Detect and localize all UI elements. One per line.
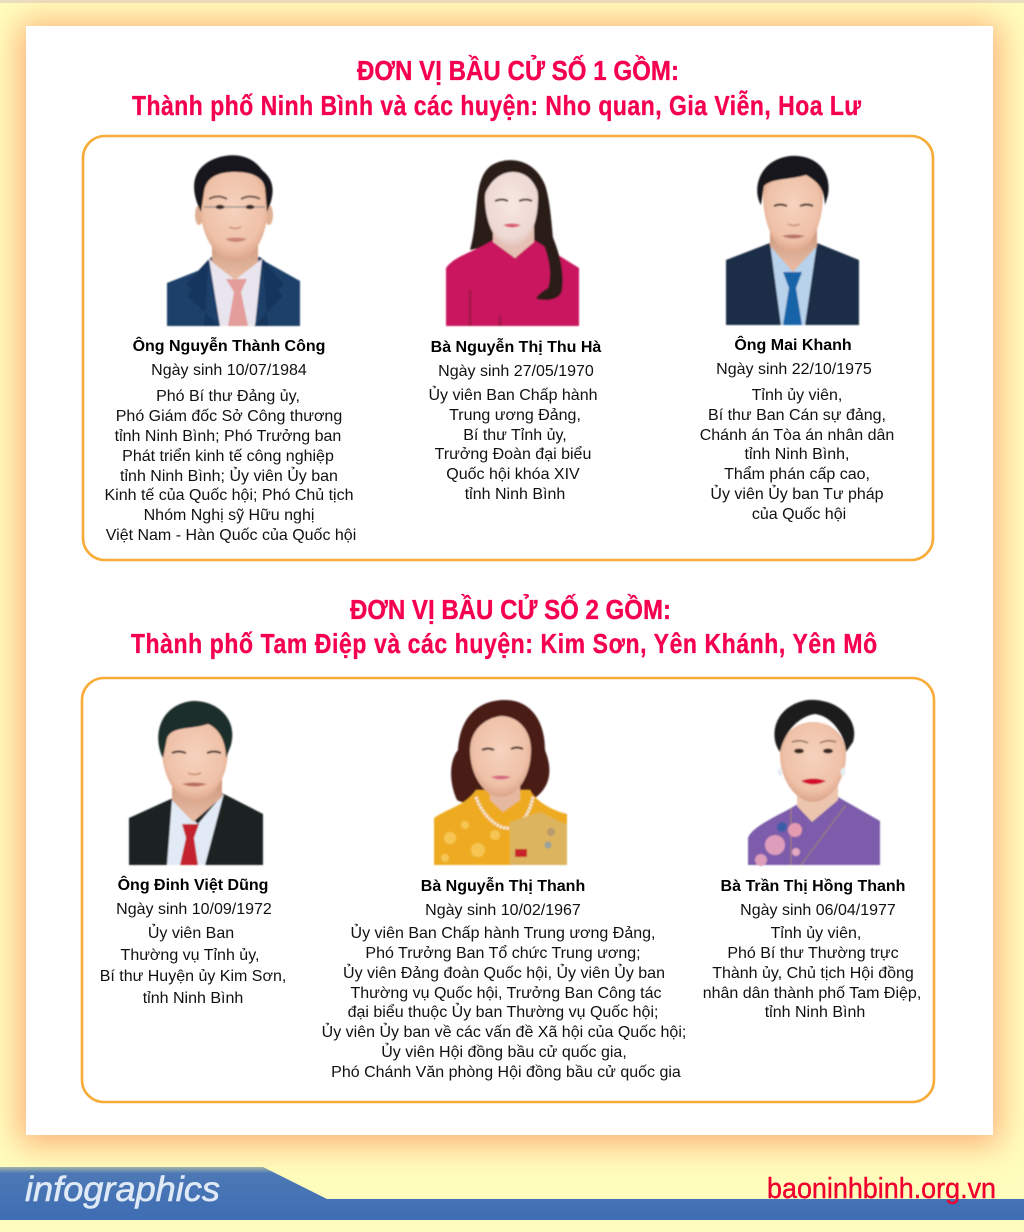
portrait: Nguyễn Thành Công: [167, 155, 300, 326]
candidate text: Nguyễn Thị Thanh: Ngày sinh 10/02/1967: [425, 902, 581, 919]
candidate text: Nguyễn Thị Thanh: Ủy viên Ủy ban về các vấn đề Xã hội của Quốc hội;: [322, 1022, 686, 1041]
heading: constituency 2: [131, 593, 877, 660]
candidate text: Nguyễn Thị Thu Hà: Trung ương Đảng,: [449, 407, 581, 424]
candidate text: Mai Khanh: Ngày sinh 22/10/1975: [716, 361, 872, 378]
heading: constituency 1: Thành phố Ninh Bình và các huyện: Nho quan, Gia Viễn, Hoa Lư: [132, 89, 861, 122]
candidate text: Mai Khanh: Thẩm phán cấp cao,: [724, 465, 870, 483]
candidate text: Nguyễn Thị Thanh: Thường vụ Quốc hội, Trưởng Ban Công tác: [350, 985, 662, 1002]
candidate text: Mai Khanh: [700, 335, 894, 523]
heading: constituency 2: ĐƠN VỊ BẦU CỬ SỐ 2 GỒM:: [350, 593, 671, 625]
heading: constituency 1: [132, 54, 861, 122]
portrait: Đinh Việt Dũng: [129, 701, 263, 865]
candidate text: Nguyễn Thành Công: Việt Nam - Hàn Quốc của Quốc hội: [106, 527, 356, 544]
candidate text: Nguyễn Thị Thu Hà: Ủy viên Ban Chấp hành: [428, 385, 598, 404]
candidate text: Trần Thị Hồng Thanh: Bà Trần Thị Hồng Thanh: [721, 878, 905, 895]
candidate text: Trần Thị Hồng Thanh: [703, 878, 921, 1021]
candidate text: Đinh Việt Dũng: Thường vụ Tỉnh ủy,: [121, 947, 259, 964]
heading: constituency 2: Thành phố Tam Điệp và các huyện: Kim Sơn, Yên Khánh, Yên Mô: [131, 629, 877, 660]
candidate text: Nguyễn Thành Công: Nhóm Nghị sỹ Hữu nghị: [144, 507, 314, 524]
candidate text: Nguyễn Thành Công: tỉnh Ninh Bình; Phó Trưởng ban: [115, 428, 341, 445]
candidate text: Đinh Việt Dũng: [100, 875, 286, 1007]
candidate text: Mai Khanh: Bí thư Ban Cán sự đảng,: [708, 407, 886, 424]
candidate text: Mai Khanh: của Quốc hội: [752, 506, 846, 523]
candidate text: Trần Thị Hồng Thanh: Phó Bí thư Thường trực: [727, 945, 899, 962]
candidate text: Trần Thị Hồng Thanh: Tỉnh ủy viên,: [771, 925, 861, 942]
candidate text: Mai Khanh: Tỉnh ủy viên,: [752, 387, 842, 404]
candidate text: Nguyễn Thị Thu Hà: Quốc hội khóa XIV: [446, 466, 580, 483]
footer banner: [0, 1167, 1024, 1220]
candidate text: Trần Thị Hồng Thanh: tỉnh Ninh Bình: [765, 1004, 865, 1021]
candidate text: Nguyễn Thị Thu Hà: [428, 337, 601, 503]
candidate text: Trần Thị Hồng Thanh: nhân dân thành phố Tam Điệp,: [703, 985, 921, 1002]
candidate text: Nguyễn Thị Thu Hà: Bí thư Tỉnh ủy,: [463, 427, 567, 444]
candidate text: Nguyễn Thị Thanh: Phó Chánh Văn phòng Hội đồng bầu cử quốc gia: [331, 1064, 681, 1081]
candidate text: Nguyễn Thị Thanh: Ủy viên Đảng đoàn Quốc hội, Ủy viên Ủy ban: [343, 963, 665, 982]
footer label: infographics: infographics: [25, 1170, 220, 1209]
candidate text: Nguyễn Thị Thanh: [322, 876, 686, 1081]
portrait: Nguyễn Thị Thu Hà: [446, 160, 579, 326]
candidate text: Nguyễn Thị Thanh: Ủy viên Hội đồng bầu cử quốc gia,: [381, 1042, 627, 1061]
candidate text: Nguyễn Thị Thu Hà: Trưởng Đoàn đại biểu: [435, 445, 591, 463]
panel: constituency 2: [82, 678, 934, 1102]
candidate text: Nguyễn Thị Thu Hà: Ngày sinh 27/05/1970: [438, 363, 594, 380]
candidate text: Trần Thị Hồng Thanh: Thành ủy, Chủ tịch Hội đồng: [712, 965, 914, 982]
portrait: Mai Khanh: [726, 156, 859, 325]
heading: constituency 1: ĐƠN VỊ BẦU CỬ SỐ 1 GỒM:: [357, 54, 679, 86]
candidate text: Nguyễn Thị Thu Hà: Bà Nguyễn Thị Thu Hà: [431, 337, 601, 356]
candidate text: Nguyễn Thành Công: Phó Bí thư Đảng ủy,: [156, 388, 300, 405]
candidate text: Nguyễn Thành Công: tỉnh Ninh Bình; Ủy viên Ủy ban: [120, 466, 338, 485]
portrait: Trần Thị Hồng Thanh: [748, 700, 880, 866]
candidate text: Đinh Việt Dũng: tỉnh Ninh Bình: [143, 990, 243, 1007]
candidate text: Nguyễn Thành Công: Ông Nguyễn Thành Công: [133, 336, 325, 355]
candidate text: Đinh Việt Dũng: Ông Đinh Việt Dũng: [118, 875, 268, 894]
candidate text: Đinh Việt Dũng: Ủy viên Ban: [148, 923, 234, 942]
panel: constituency 1: [83, 136, 933, 560]
candidate text: Nguyễn Thị Thanh: Phó Trưởng Ban Tổ chức Trung ương;: [365, 944, 641, 962]
candidate text: Mai Khanh: Ủy viên Ủy ban Tư pháp: [710, 484, 884, 503]
candidate text: Đinh Việt Dũng: Bí thư Huyện ủy Kim Sơn,: [100, 968, 286, 985]
candidate text: Mai Khanh: Chánh án Tòa án nhân dân: [700, 427, 894, 444]
portrait: Nguyễn Thị Thanh: [434, 700, 567, 865]
website address: baoninhbinh.org.vn: [767, 1173, 996, 1205]
candidate text: Trần Thị Hồng Thanh: Ngày sinh 06/04/1977: [740, 902, 896, 919]
candidate text: Nguyễn Thị Thanh: đại biểu thuộc Ủy ban Thường vụ Quốc hội;: [348, 1002, 658, 1021]
candidate text: Nguyễn Thành Công: [104, 336, 356, 544]
candidate text: Mai Khanh: tỉnh Ninh Bình,: [745, 446, 849, 463]
candidate text: Nguyễn Thành Công: Kinh tế của Quốc hội; Phó Chủ tịch: [104, 487, 354, 504]
candidate text: Nguyễn Thành Công: Phát triển kinh tế công nghiệp: [122, 447, 334, 465]
candidate text: Nguyễn Thành Công: Phó Giám đốc Sở Công thương: [116, 408, 342, 425]
candidate text: Mai Khanh: Ông Mai Khanh: [734, 335, 852, 354]
candidate text: Nguyễn Thị Thanh: Ủy viên Ban Chấp hành Trung ương Đảng,: [351, 923, 655, 942]
candidate text: Đinh Việt Dũng: Ngày sinh 10/09/1972: [116, 901, 272, 918]
candidate text: Nguyễn Thị Thu Hà: tỉnh Ninh Bình: [465, 486, 565, 503]
candidate text: Nguyễn Thị Thanh: Bà Nguyễn Thị Thanh: [421, 876, 585, 895]
candidate text: Nguyễn Thành Công: Ngày sinh 10/07/1984: [151, 362, 307, 379]
